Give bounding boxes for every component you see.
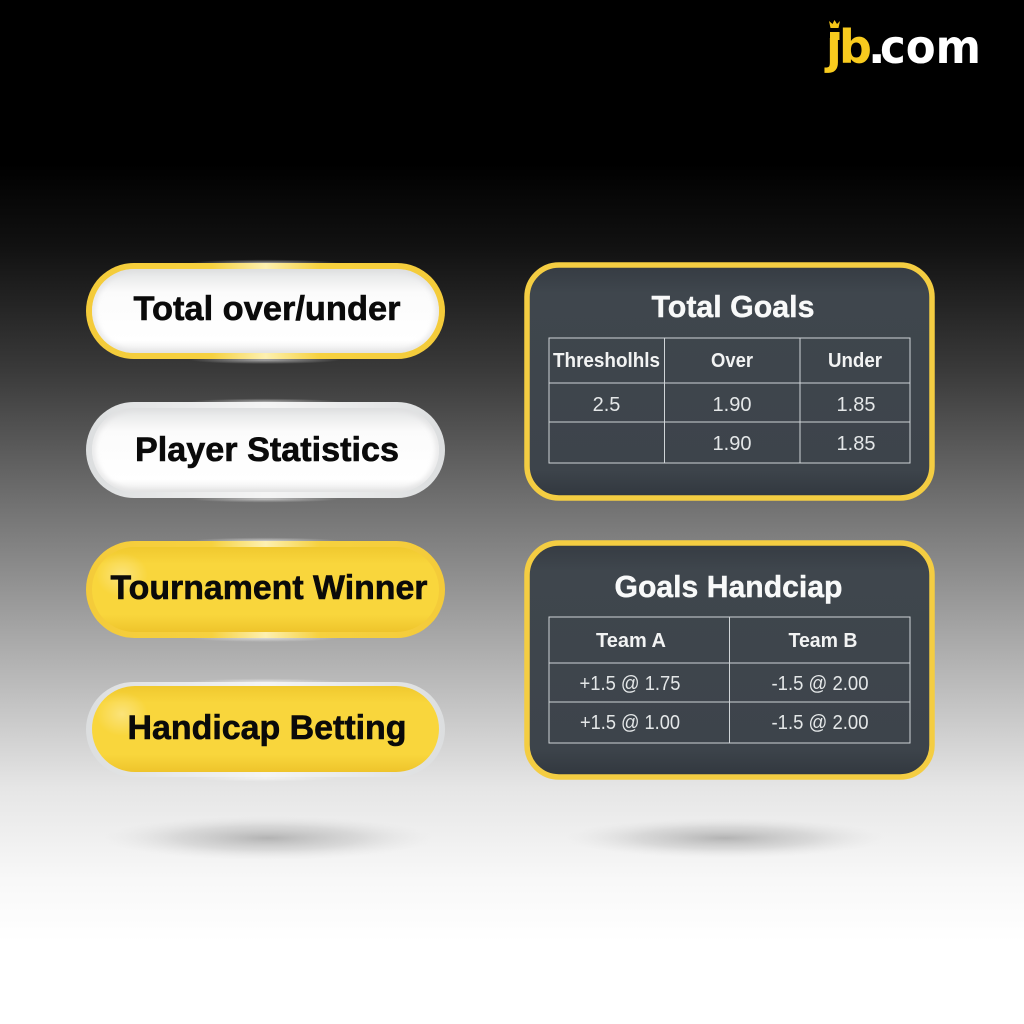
logo dot cover bbox=[822, 18, 842, 38]
panel: Total Goals bbox=[527, 265, 932, 498]
button: Tournament Winner bbox=[86, 538, 445, 642]
table: goals handicap odds: +1.5 @ 1.00 bbox=[580, 712, 680, 734]
logo: jb.com bbox=[822, 18, 981, 74]
button: Player Statistics: Player Statistics bbox=[135, 431, 399, 469]
logo wordmark: com bbox=[880, 20, 981, 74]
button: Total over/under: Total over/under bbox=[134, 290, 400, 328]
button: Tournament Winner: Tournament Winner bbox=[110, 569, 428, 607]
panel: Goals Handicap bbox=[527, 543, 932, 777]
logo j stem top bbox=[830, 32, 840, 40]
table: total goals odds: 1.85 bbox=[837, 433, 875, 455]
table: goals handicap odds: +1.5 @ 1.75 bbox=[580, 673, 680, 695]
table: goals handicap odds: Team B bbox=[788, 630, 858, 652]
logo wordmark: . bbox=[868, 20, 885, 74]
table: total goals odds: 1.90 bbox=[713, 433, 751, 455]
button: Handicap Betting bbox=[86, 678, 445, 782]
logo wordmark: j bbox=[824, 20, 842, 74]
table: goals handicap odds: -1.5 @ 2.00 bbox=[772, 712, 868, 734]
table: goals handicap odds: Team A bbox=[596, 630, 666, 652]
table: total goals odds: Thresholhls bbox=[553, 350, 660, 372]
heading: Goals Handciap: Goals Handciap bbox=[614, 569, 842, 604]
button: Player Statistics bbox=[86, 398, 445, 502]
heading: Total Goals: Total Goals bbox=[652, 289, 814, 324]
button: Handicap Betting: Handicap Betting bbox=[128, 709, 406, 747]
table: goals handicap odds bbox=[549, 617, 910, 743]
table: total goals odds: 1.85 bbox=[837, 394, 875, 416]
icon: crown bbox=[829, 20, 840, 28]
shadow: under panels bbox=[565, 818, 885, 858]
table: total goals odds: 2.5 bbox=[593, 394, 620, 416]
table: total goals odds: 1.90 bbox=[713, 394, 751, 416]
shadow: under buttons bbox=[103, 816, 433, 860]
table: goals handicap odds: -1.5 @ 2.00 bbox=[772, 673, 868, 695]
button: Total over/under bbox=[86, 260, 445, 364]
table: total goals odds: Over bbox=[711, 350, 753, 372]
table: total goals odds: Under bbox=[828, 350, 882, 372]
table: total goals odds bbox=[549, 338, 910, 463]
logo wordmark: b bbox=[839, 20, 872, 74]
